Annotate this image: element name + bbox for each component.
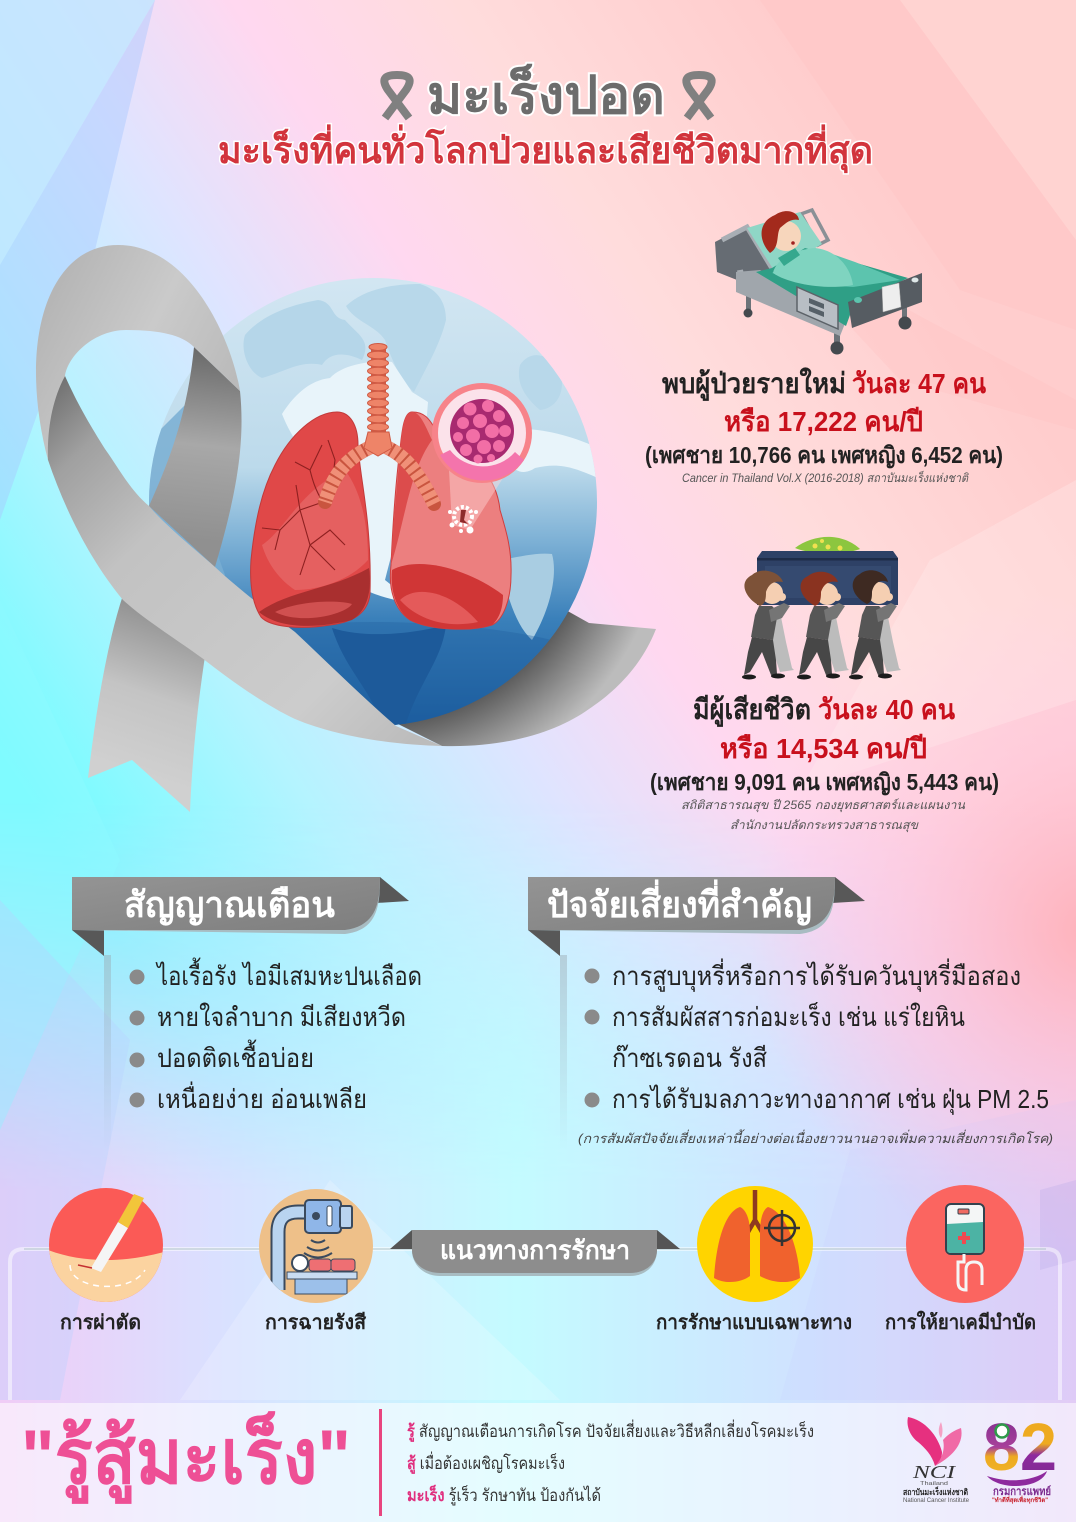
pallbearer three xyxy=(849,570,897,680)
logo: Department of Medical Services 82: 82 xyxy=(983,1410,1057,1485)
warning signs list: เหนื่อยง่าย อ่อนเพลีย xyxy=(157,1081,367,1114)
title subtitle: มะเร็งที่คนทั่วโลกป่วยและเสียชีวิตมากที่สุด xyxy=(218,124,873,174)
label: surgery: การผ่าตัด xyxy=(60,1312,141,1334)
warning signs list: ปอดติดเชื้อบ่อย xyxy=(157,1039,314,1073)
warning banner xyxy=(72,877,409,956)
icon: surgery xyxy=(48,1188,164,1304)
panel: warning signs xyxy=(72,877,422,1150)
ribbon front band xyxy=(47,376,442,746)
title main text: มะเร็งปอด xyxy=(427,64,665,125)
warning signs list: ไอเรื้อรัง ไอมีเสมหะปนเลือด xyxy=(155,957,422,991)
deaths yearly figure: หรือ 14,534 คน/ปี xyxy=(720,733,927,764)
logo: National Cancer Institute: NCI xyxy=(912,1462,956,1482)
deaths by sex: (เพศชาย 9,091 คน เพศหญิง 5,443 คน) xyxy=(650,769,999,796)
icon: targeted therapy xyxy=(697,1186,813,1302)
icon: chemotherapy xyxy=(906,1185,1024,1303)
text block: deaths xyxy=(650,694,999,833)
label: radiation therapy: การฉายรังสี xyxy=(265,1311,367,1334)
warning signs list xyxy=(130,957,422,1114)
risk factors list: การสูบบุหรี่หรือการได้รับควันบุหรี่มือสอง xyxy=(612,958,1021,992)
new patients per day: พบผู้ป่วยรายใหม่ xyxy=(662,367,846,401)
illustration: ribbon, globe and lungs xyxy=(36,245,656,812)
trachea xyxy=(364,344,392,456)
bronchial veins xyxy=(262,440,345,575)
coffin xyxy=(757,551,898,605)
magnifier cone xyxy=(449,470,503,530)
label: chemotherapy: การให้ยาเคมีบำบัด xyxy=(885,1310,1036,1334)
icon: pallbearers carrying coffin xyxy=(742,537,901,680)
tumour spot xyxy=(448,507,478,534)
slogan line one: รู้ สัญญาณเตือนการเกิดโรค ปัจจัยเสี่ยงและวิธีหลีกเลี่ยงโรคมะเร็ง xyxy=(407,1419,814,1443)
icon: hospital bed with patient xyxy=(715,210,922,354)
icon: left title ribbon xyxy=(384,75,410,118)
label: targeted therapy: การรักษาแบบเฉพาะทาง xyxy=(656,1312,852,1334)
right lung xyxy=(390,412,511,629)
logo: National Cancer Institute: สถาบันมะเร็งแห่งชาติ xyxy=(903,1485,968,1497)
magnifier circle with cancer cells xyxy=(432,383,532,483)
bronchi xyxy=(325,444,434,504)
deaths source line one: สถิติสาธารณสุข ปี 2565 กองยุทธศาสตร์และแผนงาน xyxy=(681,798,966,813)
risk factors list: ก๊าซเรดอน รังสี xyxy=(612,1043,767,1073)
warning banner: สัญญาณเตือน xyxy=(124,884,335,926)
logo: Department of Medical Services 82: "ทำดีที่สุดเพื่อทุกชีวิต" xyxy=(992,1495,1048,1504)
treatment banner xyxy=(390,1230,680,1276)
deaths daily figure: วันละ 40 คน xyxy=(818,694,955,725)
left lung xyxy=(251,412,370,627)
logo: National Cancer Institute xyxy=(903,1417,969,1504)
risk banner xyxy=(528,877,865,956)
treatment banner: แนวทางการรักษา xyxy=(440,1235,630,1265)
slogan line three: มะเร็ง รู้เร็ว รักษาทัน ป้องกันได้ xyxy=(407,1483,601,1506)
bed legs and wheels xyxy=(744,285,912,354)
deaths per day: มีผู้เสียชีวิต xyxy=(693,694,811,727)
ribbon loop xyxy=(36,245,240,460)
new patients daily figure: วันละ 47 คน xyxy=(852,368,986,399)
new patients by sex: (เพศชาย 10,766 คน เพศหญิง 6,452 คน) xyxy=(645,442,1003,469)
logo: Department of Medical Services 82: กรมการแพทย์ xyxy=(993,1485,1051,1498)
campaign slogan: "รู้สู้มะเร็ง" xyxy=(21,1411,351,1504)
risk factors list: การสัมผัสสารก่อมะเร็ง เช่น แร่ใยหิน xyxy=(612,1001,965,1032)
warning signs list: หายใจลำบาก มีเสียงหวีด xyxy=(157,1002,406,1032)
ribbon back strand xyxy=(149,347,242,567)
slogan line two: สู้ เมื่อต้องเผชิญโรคมะเร็ง xyxy=(407,1451,565,1475)
risk banner: ปัจจัยเสี่ยงที่สำคัญ xyxy=(547,879,812,926)
logo: National Cancer Institute: Thailand xyxy=(920,1481,948,1487)
ribbon left tail xyxy=(88,595,206,812)
new patients yearly figure: หรือ 17,222 คน/ปี xyxy=(724,406,923,437)
pallbearer ghost legs and bodies xyxy=(768,612,901,672)
divider xyxy=(379,1409,382,1516)
deaths source line two: สำนักงานปลัดกระทรวงสาธารณสุข xyxy=(730,818,919,833)
panel: campaign footer xyxy=(0,1403,1076,1522)
flowers xyxy=(795,537,860,553)
globe xyxy=(149,278,597,725)
lungs xyxy=(251,344,532,629)
icon: radiation therapy xyxy=(259,1188,374,1304)
panel: risk factors xyxy=(528,877,1053,1150)
text block: new patients xyxy=(645,367,1003,485)
risk factors list xyxy=(584,958,1049,1115)
risk footnote: (การสัมผัสปัจจัยเสี่ยงเหล่านี้อย่างต่อเนื่องยาวนานอาจเพิ่มความเสี่ยงการเกิดโรค) xyxy=(578,1129,1053,1146)
ribbon right tail end xyxy=(380,609,656,746)
new patients source: Cancer in Thailand Vol.X (2016-2018) สถาบันมะเร็งแห่งชาติ xyxy=(682,470,969,485)
title xyxy=(218,64,873,174)
pallbearer one xyxy=(742,571,790,680)
panel: treatment xyxy=(10,1185,1060,1400)
pallbearer two xyxy=(797,572,845,680)
icon: right title ribbon xyxy=(686,75,712,118)
logo: National Cancer Institute: National Cancer Institute xyxy=(903,1497,969,1504)
